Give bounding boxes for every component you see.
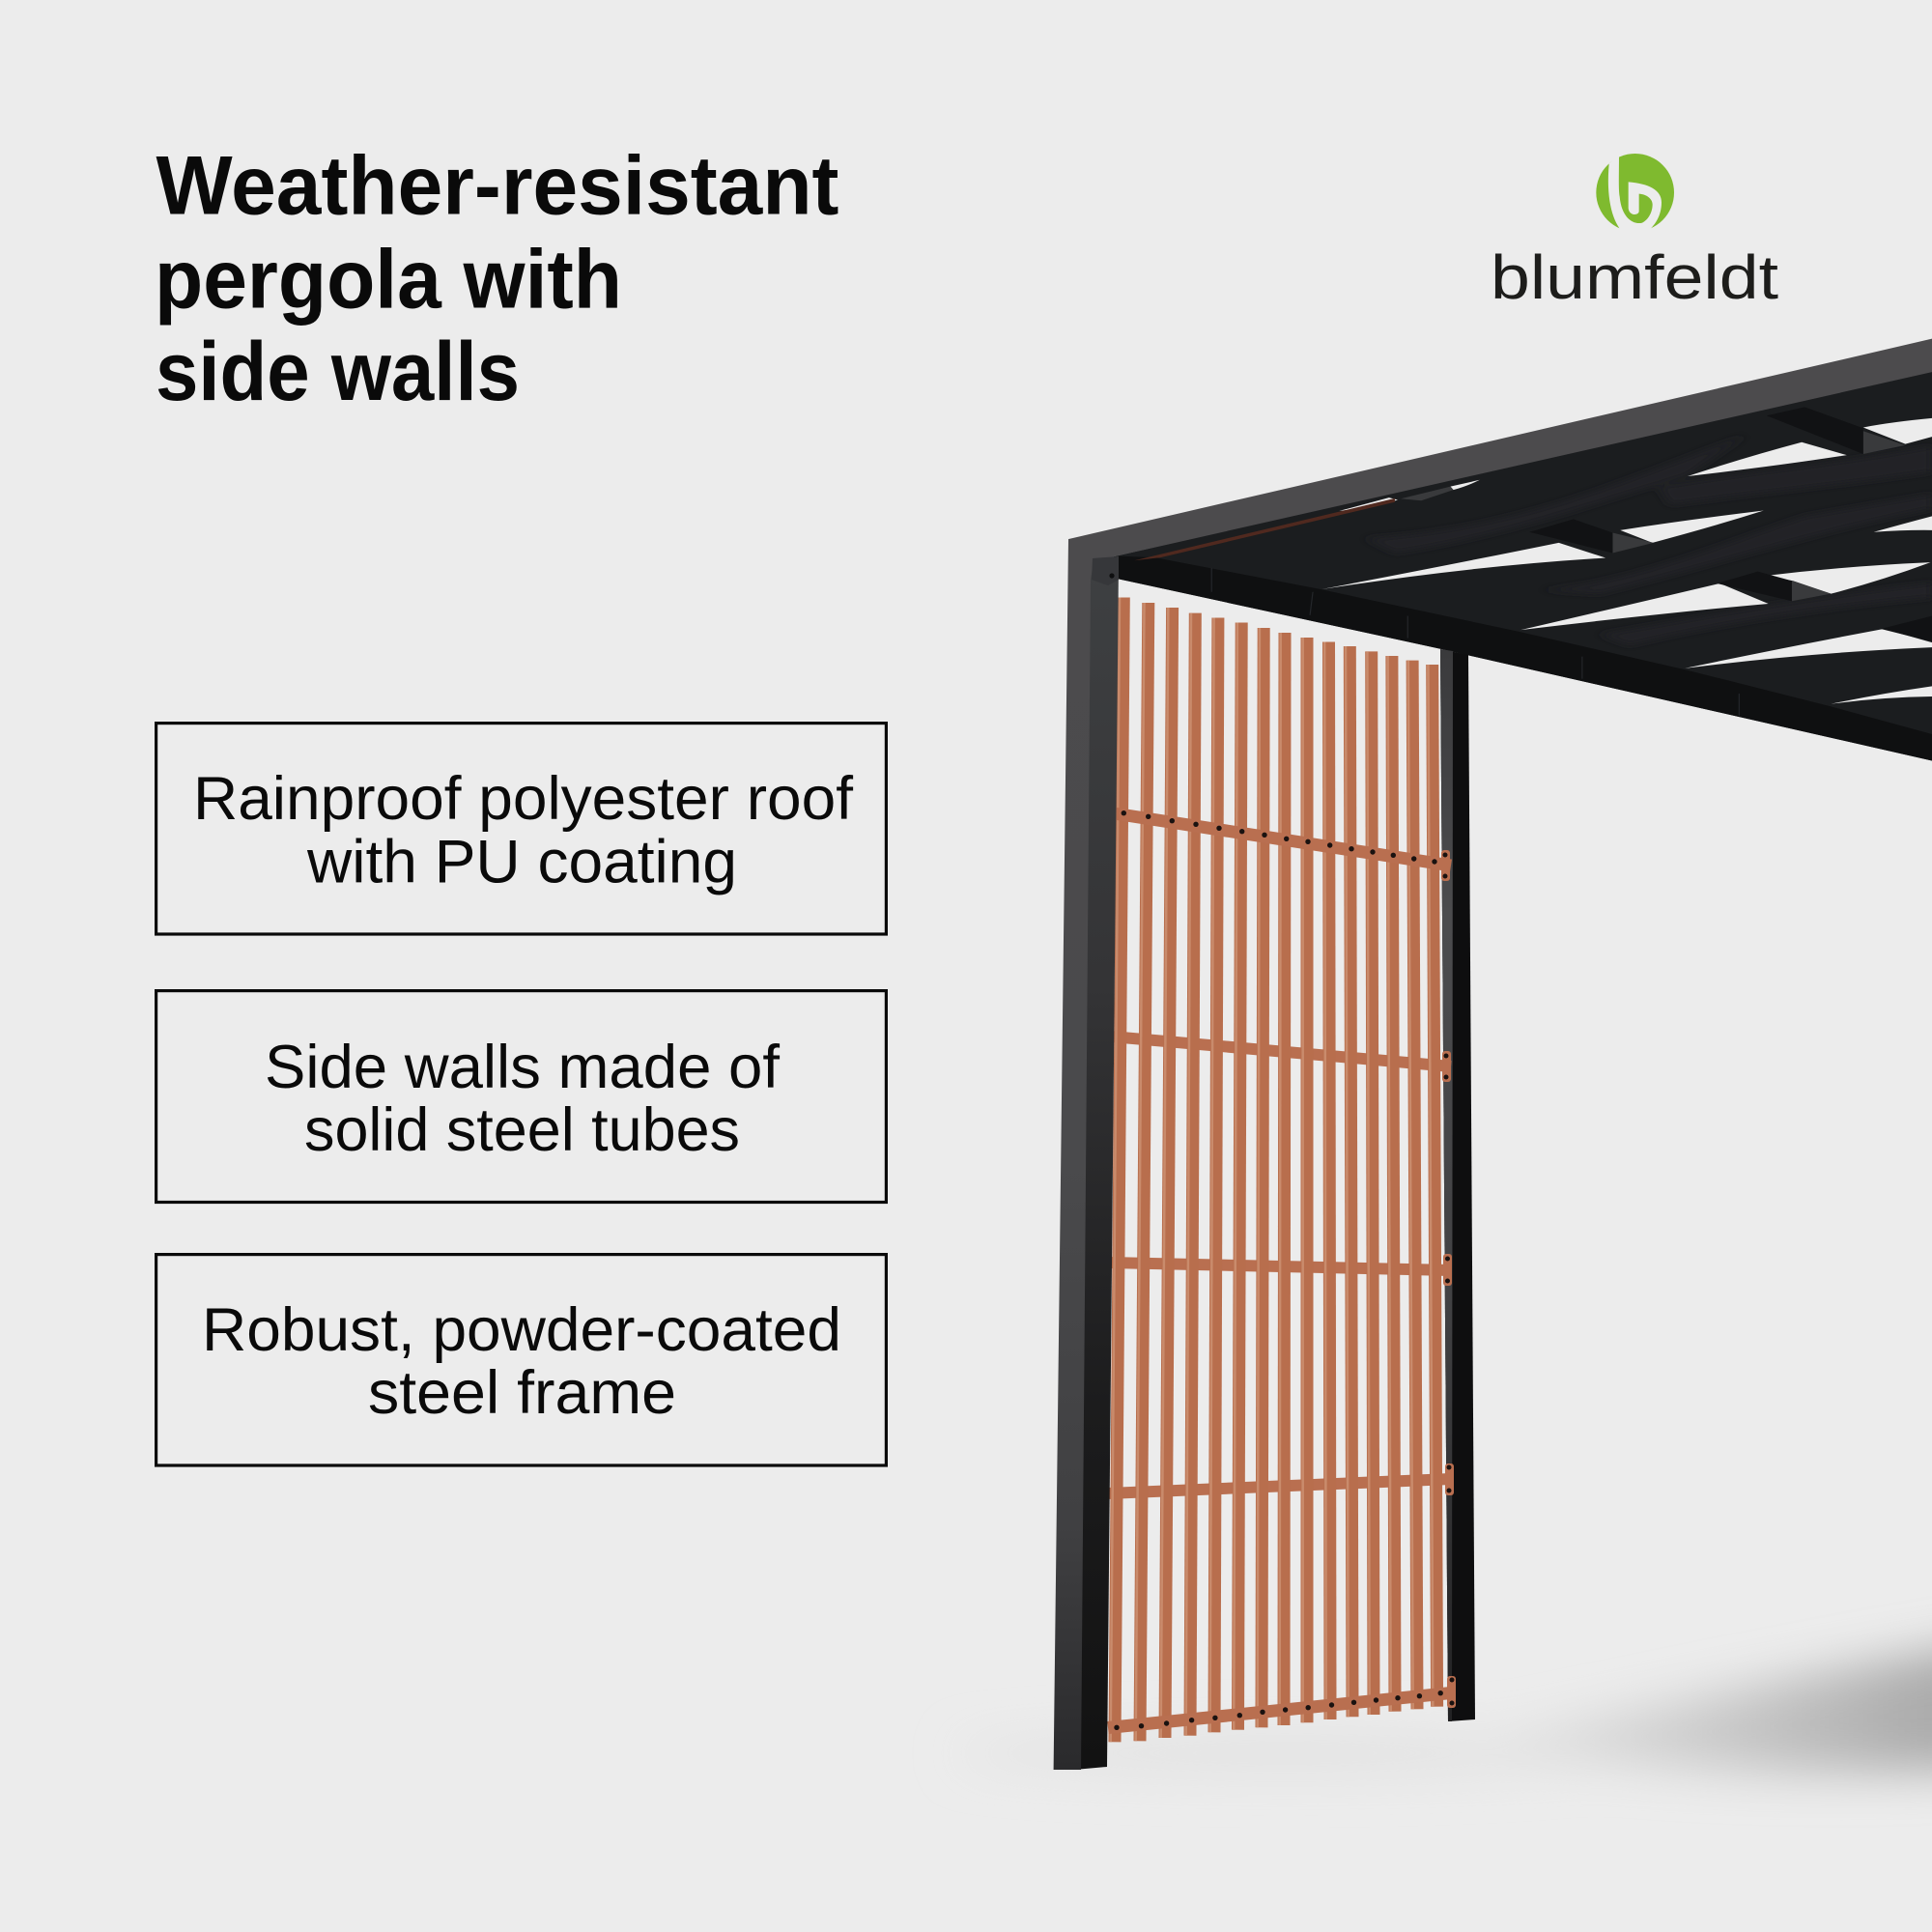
icon: green leaf b	[1596, 154, 1674, 236]
screw holes	[1114, 810, 1455, 1730]
title	[155, 140, 838, 418]
ground shadow	[956, 1642, 1932, 1773]
brown lining	[1134, 498, 1395, 560]
logo: blumfeldt	[1491, 154, 1778, 312]
title: Weather-resistant	[156, 140, 838, 233]
pergola illustration	[956, 339, 1932, 1773]
feature box 2: Side walls made of	[265, 1034, 780, 1101]
title: pergola with	[155, 233, 622, 326]
roof canvas and frame	[1068, 339, 1932, 761]
vertical slats	[1115, 597, 1437, 1742]
slat highlights	[1111, 597, 1433, 1742]
front beam	[1119, 556, 1932, 761]
corner bracket	[1092, 556, 1119, 585]
slat lattice	[1108, 597, 1456, 1742]
front crossbars	[1108, 813, 1451, 1727]
rear post	[1440, 649, 1475, 1721]
feature box 1: Rainproof polyester roof	[193, 765, 853, 833]
feature box 3	[156, 1255, 886, 1465]
feature box 1: with PU coating	[306, 829, 737, 896]
canvas wave highlights	[1366, 435, 1932, 645]
beam seams	[1211, 568, 1739, 716]
feature box 2: solid steel tubes	[304, 1096, 740, 1164]
canvas base	[1094, 368, 1932, 761]
top beam	[1068, 339, 1932, 561]
title: side walls	[156, 326, 520, 418]
roof crossbars	[1401, 431, 1905, 601]
roof gaps	[1321, 418, 1932, 704]
front post	[1054, 539, 1119, 1770]
feature box 1	[156, 724, 886, 934]
feature box 3: steel frame	[368, 1359, 676, 1427]
feature box 3: Robust, powder-coated	[202, 1296, 841, 1364]
mounting tabs	[1441, 850, 1456, 1708]
rear crossbars	[1108, 1037, 1451, 1493]
wordmark: blumfeldt	[1491, 242, 1778, 312]
feature box 2	[156, 991, 886, 1202]
